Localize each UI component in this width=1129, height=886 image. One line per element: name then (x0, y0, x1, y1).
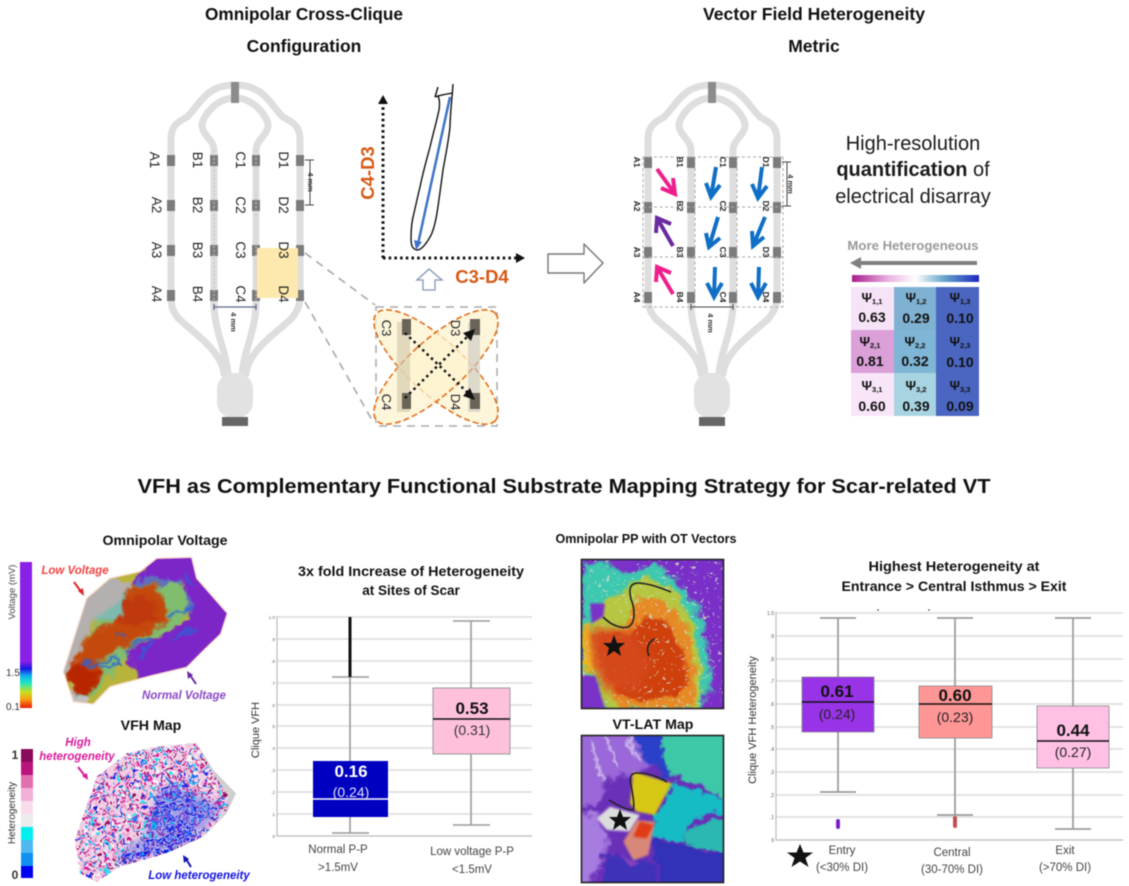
title: omnipolar cross-clique configuration: Omnipolar Cross-Clique (205, 4, 403, 24)
OT vector (418, 97, 450, 244)
electrode labels: D3 (276, 241, 291, 259)
heading: VFH Map (121, 718, 182, 734)
table: psi values: 0.32 (901, 353, 929, 369)
category labels: Low voltage P-P (430, 846, 514, 858)
box: central: (0.23) (937, 709, 973, 725)
panel: box plot entry central exit: .2 (770, 793, 774, 799)
table: psi values: 0.10 (946, 310, 974, 326)
electrode labels: D3 (761, 247, 771, 258)
box: exit (1037, 618, 1109, 829)
table: psi values: 0.60 (858, 398, 886, 414)
panel: box plot entry central exit (747, 559, 1123, 876)
text: high-resolution quantification: quantification of (836, 159, 990, 181)
voltage colour bar: 0.1 (6, 702, 20, 713)
electrode labels: A3 (149, 242, 164, 258)
annotation: high heterogeneity (39, 737, 115, 780)
table: psi values: 1,2 (916, 297, 926, 306)
electrode labels: A4 (632, 292, 642, 303)
chart: bipolar loop on orthogonal axes: C3-D4 (455, 266, 509, 287)
panel: box plot entry central exit: .3 (770, 770, 774, 776)
annotation: low heterogeneity (148, 855, 250, 882)
VFH dotted map (74, 742, 236, 882)
panel: box plot scar vs normal: .4 (271, 746, 275, 751)
annotation: low heterogeneity: Low heterogeneity (148, 870, 250, 882)
icon: entry star (787, 844, 813, 867)
table: psi values: 3,2 (916, 385, 926, 394)
box: low voltage P-P (433, 621, 510, 825)
box: exit: (0.27) (1055, 744, 1091, 760)
electrode labels: D1 (761, 157, 771, 168)
heading (298, 564, 525, 598)
electrode labels: B4 (675, 292, 685, 303)
legend: more heterogeneous arrow and gradient: More Heterogeneous (847, 238, 979, 253)
panel: box plot scar vs normal (250, 564, 532, 876)
electrode labels: B4 (190, 286, 205, 303)
title: vector field heterogeneity metric: Vector Field Heterogeneity (703, 4, 925, 24)
electrode labels: B1 (675, 157, 685, 168)
table: psi values: 0.39 (902, 398, 930, 414)
text: high-resolution quantification: High-resolution (846, 133, 980, 155)
voltage map (62, 556, 228, 705)
panel: box plot entry central exit: .1 (770, 815, 774, 821)
table: psi values: 2,2 (915, 341, 925, 350)
heading (842, 559, 1067, 594)
panel: box plot entry central exit: .4 (770, 747, 774, 753)
inset labels: D3 (448, 320, 463, 336)
annotation: high heterogeneity: heterogeneity (39, 751, 115, 763)
highlighted clique region (257, 248, 298, 298)
electrode labels: B3 (675, 247, 685, 258)
category labels: >1.5mV (318, 862, 358, 874)
y axis label: Clique VFH Heterogeneity (747, 656, 759, 784)
category labels: Central (933, 847, 971, 859)
panel: box plot scar vs normal: .5 (271, 724, 275, 729)
big hollow right arrow (548, 244, 603, 283)
electrode labels: C1 (233, 151, 248, 169)
4 mm scale markers: 4 mm (306, 172, 315, 192)
panel: box plot scar vs normal: .9 (271, 637, 275, 642)
electrode labels: B1 (190, 152, 205, 168)
electrode labels: C1 (718, 157, 728, 168)
panel: box plot scar vs normal: .1 (271, 812, 275, 817)
category labels: (<30% DI) (816, 862, 868, 874)
electrode labels: C2 (233, 196, 248, 214)
category labels (816, 845, 1091, 876)
table: psi values: 0.63 (858, 309, 886, 325)
voltage colour bar (6, 562, 32, 713)
electrode labels: C3 (718, 247, 728, 258)
panel: VFH map (7, 718, 250, 886)
category labels: Entry (829, 845, 856, 857)
table: psi values: Ψ (905, 334, 915, 349)
box: central: 0.60 (938, 686, 972, 705)
panel: box plot entry central exit: .8 (770, 657, 774, 663)
electrode labels: B2 (675, 201, 685, 212)
annotation: normal voltage: Normal Voltage (142, 690, 227, 702)
table: psi values: 3,3 (960, 385, 970, 394)
box: normal P-P: (0.24) (333, 784, 369, 800)
heading: Omnipolar PP with OT Vectors (556, 531, 736, 546)
electrode labels: C4 (233, 285, 248, 303)
box: low voltage P-P: 0.53 (455, 699, 489, 718)
panel: box plot scar vs normal: 0 (272, 834, 275, 839)
heterogeneity colour scale: 1 (12, 748, 19, 762)
box: normal P-P: 0.16 (334, 762, 368, 781)
electrode labels: A1 (147, 152, 162, 168)
voltage colour bar: Voltage (mV) (7, 565, 18, 619)
category labels: (30-70% DI) (921, 864, 983, 876)
inset labels (379, 320, 463, 410)
4 mm scale markers (691, 162, 795, 333)
table: psi values: Ψ (906, 378, 916, 393)
electrode labels: A2 (149, 197, 164, 213)
voltage colour bar: 1.5 (6, 668, 20, 679)
title: omnipolar cross-clique configuration: Configuration (247, 36, 361, 56)
panel: box plot entry central exit: 1.0 (767, 611, 774, 617)
map (580, 558, 726, 710)
grid (776, 613, 1123, 817)
vector arrows (656, 167, 767, 297)
heading: Entrance > Central Isthmus > Exit (842, 579, 1067, 594)
table: psi values: 2,3 (960, 341, 970, 350)
inset labels: C3 (379, 320, 394, 336)
box: entry (802, 618, 874, 827)
title: vector field heterogeneity metric (703, 4, 925, 56)
electrode labels: C3 (233, 241, 248, 259)
table: psi values: 0.81 (856, 353, 884, 369)
isthmus line (609, 773, 667, 810)
table: psi values: 0.10 (946, 354, 974, 370)
annotation: low voltage (41, 565, 109, 596)
electrode labels: B3 (190, 242, 205, 258)
clique ellipses (358, 293, 514, 441)
zoom guide lines (305, 253, 375, 420)
table: psi values (851, 287, 979, 416)
table: psi values: 1,1 (872, 297, 882, 306)
inset labels: D4 (448, 394, 463, 410)
table: psi values: Ψ (950, 334, 960, 349)
heading: Omnipolar Voltage (102, 533, 228, 549)
category labels (308, 844, 514, 876)
title: vector field heterogeneity metric: Metric (788, 36, 840, 56)
diagram: right catheter with vector field (632, 82, 795, 426)
electrode labels: D2 (276, 196, 291, 214)
electrode labels: A3 (632, 247, 642, 258)
loop (411, 84, 453, 250)
category labels: <1.5mV (452, 864, 492, 876)
table: psi values: Ψ (950, 378, 960, 393)
VT-LAT map (580, 734, 726, 884)
box: entry: 0.61 (820, 682, 854, 701)
panel: box plot scar vs normal: .2 (271, 790, 275, 795)
electrode labels (632, 157, 771, 303)
electrode labels (147, 151, 291, 303)
panel: box plot scar vs normal: .6 (271, 703, 275, 708)
category labels: (>70% DI) (1039, 862, 1091, 874)
panel: box plot scar vs normal: .3 (271, 768, 275, 773)
diagram: left catheter with electrodes (147, 82, 315, 426)
box: entry: (0.24) (819, 706, 855, 722)
table: psi values: 3,1 (872, 385, 882, 394)
annotation: low voltage: Low Voltage (41, 565, 109, 577)
clique grid (643, 157, 783, 307)
annotation: high heterogeneity: High (65, 737, 91, 749)
category labels: Exit (1055, 845, 1075, 857)
table: psi values: 2,1 (870, 341, 880, 350)
inset labels: C4 (379, 394, 394, 410)
electrode labels: D4 (276, 285, 291, 303)
isthmus line (603, 583, 671, 656)
panel: box plot entry central exit: .7 (770, 679, 774, 685)
hollow up arrow (417, 269, 442, 290)
electrode labels: A4 (149, 286, 164, 303)
4 mm scale markers: 4 mm (706, 313, 715, 333)
panel: box plot entry central exit: 0 (771, 838, 774, 844)
electrode labels: B2 (190, 197, 205, 213)
legend: more heterogeneous arrow and gradient (847, 238, 979, 282)
electrode labels: C4 (718, 292, 728, 303)
dotted bipole arrows (405, 333, 468, 398)
electrode labels: D2 (761, 201, 771, 212)
heading: at Sites of Scar (362, 583, 461, 598)
table: psi values: Ψ (950, 290, 960, 305)
star: entry site (609, 809, 631, 830)
heterogeneity colour scale: Heterogeneity (7, 782, 18, 844)
box: exit: 0.44 (1056, 721, 1090, 740)
category labels: Normal P-P (308, 844, 368, 856)
box: central (919, 618, 992, 826)
box: normal P-P (313, 617, 388, 833)
panel: box plot scar vs normal: 1.0 (269, 615, 275, 620)
panel: box plot entry central exit: .5 (770, 725, 774, 731)
text: high-resolution quantification (835, 133, 991, 208)
heading: 3x fold Increase of Heterogeneity (298, 564, 525, 579)
4 mm scale markers: 4 mm (786, 174, 795, 194)
box: low voltage P-P: (0.31) (454, 722, 490, 738)
section heading: VFH as Complementary Functional Substrate Mapping Strategy for Scar-related VT (138, 476, 990, 498)
table: psi values: Ψ (862, 290, 872, 305)
table: psi values: Ψ (862, 378, 872, 393)
table: psi values: 0.09 (946, 398, 974, 414)
panel: box plot entry central exit: .6 (770, 702, 774, 708)
axes (383, 104, 516, 258)
text: high-resolution quantification: electrical disarray (835, 186, 991, 208)
heterogeneity colour scale (7, 748, 33, 882)
panel: box plot scar vs normal: .8 (271, 659, 275, 664)
table: psi values: Ψ (860, 334, 870, 349)
axis labels: C4-D3 (357, 146, 378, 200)
annotation: normal voltage (142, 671, 227, 702)
panel: box plot scar vs normal: .7 (271, 681, 275, 686)
panel: box plot entry central exit: .9 (770, 634, 774, 640)
panel: omnipolar voltage map (6, 533, 243, 717)
heading: VT-LAT map: VT-LAT Map (613, 717, 694, 733)
electrode labels: D1 (276, 151, 291, 169)
y axis label: Clique VFH (250, 702, 262, 758)
title: omnipolar cross-clique configuration (205, 4, 403, 56)
heterogeneity colour scale: 0 (12, 868, 19, 882)
table: psi values: Ψ (906, 290, 916, 305)
electrode labels: A1 (632, 157, 642, 168)
electrode labels: C2 (718, 201, 728, 212)
grid (277, 617, 532, 814)
chart: bipolar loop on orthogonal axes (357, 84, 525, 287)
table: psi values: 0.29 (902, 310, 930, 326)
inset: cross-clique electrode pair (358, 293, 514, 441)
heading: Highest Heterogeneity at (868, 559, 1040, 574)
electrode labels: A2 (632, 201, 642, 212)
4 mm scale markers (214, 160, 315, 332)
4 mm scale markers: 4 mm (229, 312, 238, 332)
table: psi values: 1,3 (960, 297, 970, 306)
panel: omnipolar PP with OT vectors (556, 531, 737, 886)
star: entry site (603, 635, 625, 656)
electrode labels: D4 (761, 292, 771, 303)
